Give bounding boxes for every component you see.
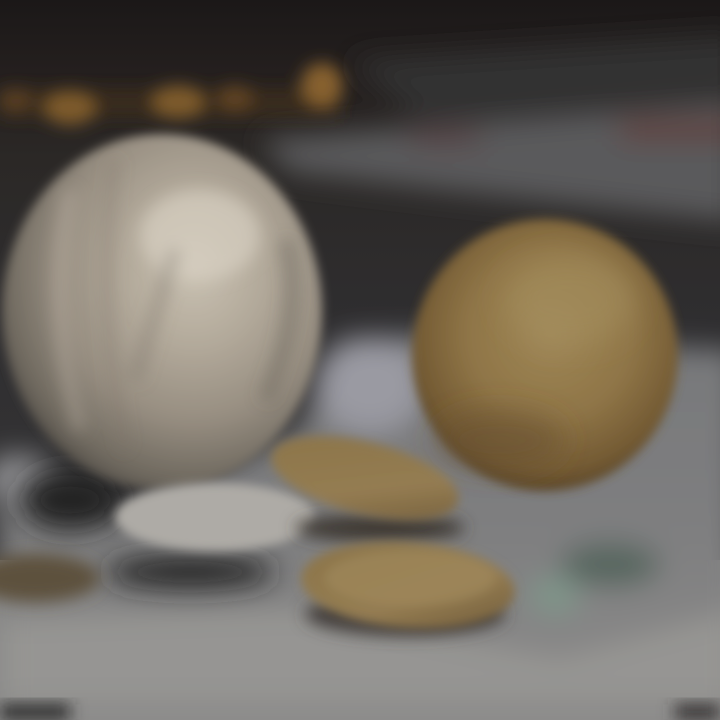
- left coin: [0, 554, 100, 602]
- silver sphere highlights: [60, 160, 292, 450]
- grey background band: [260, 35, 720, 222]
- gold sphere: [412, 219, 678, 491]
- bottom corners: [0, 704, 720, 720]
- shadow beneath front coin: [305, 592, 505, 636]
- shadow beneath middle coin: [295, 514, 465, 542]
- front gold coin: [298, 535, 518, 635]
- paper currency base: [0, 560, 720, 720]
- white coin: [115, 483, 315, 551]
- paper currency: [0, 335, 720, 720]
- silver sphere: [2, 134, 322, 490]
- gold sphere shading: [435, 255, 635, 470]
- blurred orange lights: [0, 63, 343, 125]
- middle gold coin: [263, 420, 467, 536]
- shadow under silver sphere: [20, 470, 275, 588]
